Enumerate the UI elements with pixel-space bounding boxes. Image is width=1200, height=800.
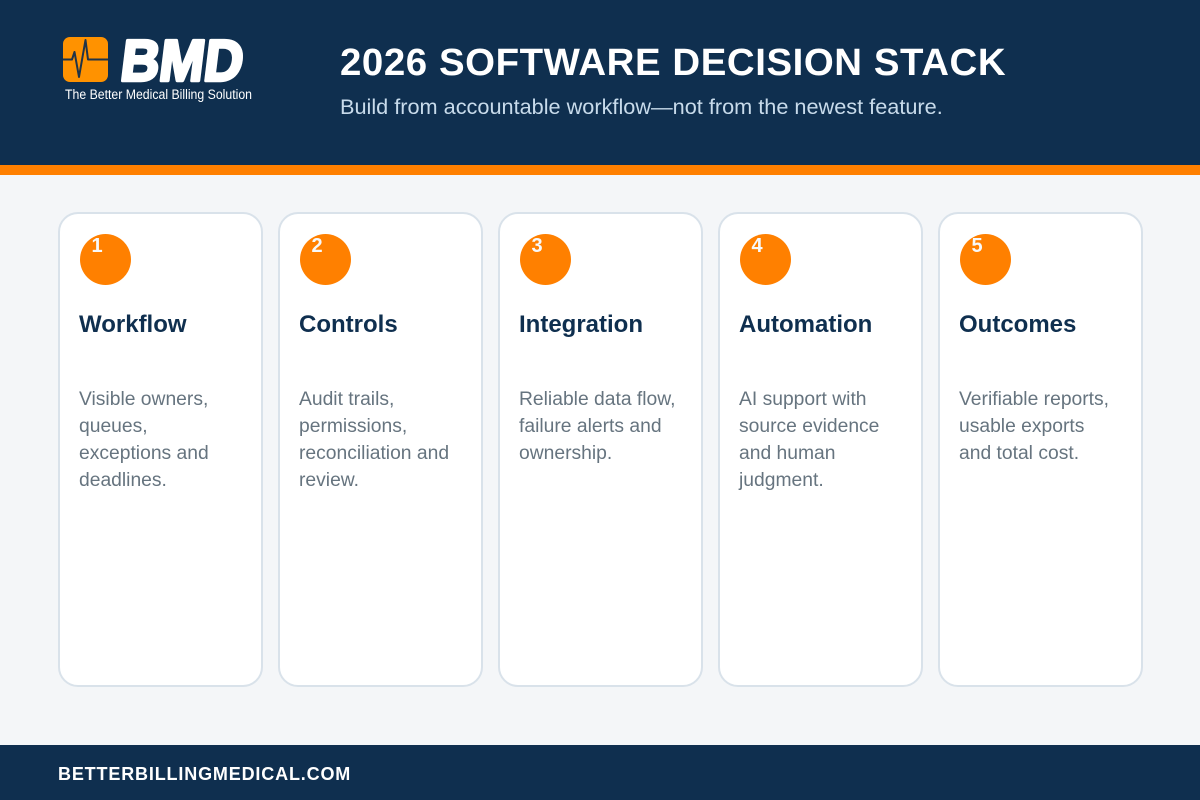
- description: outcomes: usable exports: [959, 416, 1084, 437]
- description: workflow: Visible owners,: [79, 389, 208, 410]
- number badge 3: [520, 234, 571, 285]
- panel: outcomes: [938, 212, 1143, 687]
- description: integration: Reliable data flow,: [519, 389, 676, 410]
- description: automation: [738, 389, 879, 491]
- description: integration: ownership.: [519, 443, 612, 464]
- number badge 4: 4: [751, 235, 763, 257]
- number badge 1: 1: [91, 235, 103, 257]
- number badge 2: 2: [311, 235, 323, 257]
- panel: automation: [718, 212, 923, 687]
- logo: [63, 30, 252, 102]
- heading: workflow: Workflow: [79, 311, 187, 338]
- subtitle: Build from accountable workflow—not from the newest feature.: [340, 94, 943, 119]
- number badge 5: [960, 234, 1011, 285]
- panel: workflow: [58, 212, 263, 687]
- description: integration: [519, 389, 676, 464]
- description: automation: AI support with: [739, 389, 867, 410]
- description: outcomes: [959, 389, 1109, 464]
- description: outcomes: Verifiable reports,: [959, 389, 1109, 410]
- number badge 1: [80, 234, 131, 285]
- description: controls: reconciliation and: [299, 443, 449, 464]
- description: controls: Audit trails,: [299, 389, 394, 410]
- description: controls: review.: [299, 470, 359, 491]
- panel: controls: [278, 212, 483, 687]
- footer band: [0, 745, 1200, 800]
- orange accent bar: [0, 165, 1200, 175]
- panel: integration: [498, 212, 703, 687]
- description: workflow: deadlines.: [79, 470, 167, 491]
- heading: automation: Automation: [739, 311, 872, 338]
- description: workflow: [79, 389, 209, 491]
- heading: integration: Integration: [519, 311, 643, 338]
- description: automation: source evidence: [739, 416, 879, 437]
- description: automation: judgment.: [739, 470, 824, 491]
- heading: outcomes: Outcomes: [959, 311, 1076, 338]
- footer website: BETTERBILLINGMEDICAL.COM: [58, 764, 351, 784]
- description: automation: and human: [739, 443, 835, 464]
- icon: heartbeat square: [63, 37, 108, 82]
- description: outcomes: and total cost.: [959, 443, 1079, 464]
- description: controls: permissions,: [299, 416, 407, 437]
- number badge 3: 3: [531, 235, 543, 257]
- description: integration: failure alerts and: [519, 416, 662, 437]
- number badge 5: 5: [971, 235, 983, 257]
- title: 2026 SOFTWARE DECISION STACK: [340, 41, 1006, 84]
- number badge 2: [300, 234, 351, 285]
- heading: controls: Controls: [299, 311, 398, 338]
- logo wordmark: BMD: [117, 30, 247, 93]
- number badge 4: [740, 234, 791, 285]
- description: workflow: exceptions and: [79, 443, 209, 464]
- description: controls: [299, 389, 449, 491]
- header band: [0, 0, 1200, 165]
- description: workflow: queues,: [79, 416, 148, 437]
